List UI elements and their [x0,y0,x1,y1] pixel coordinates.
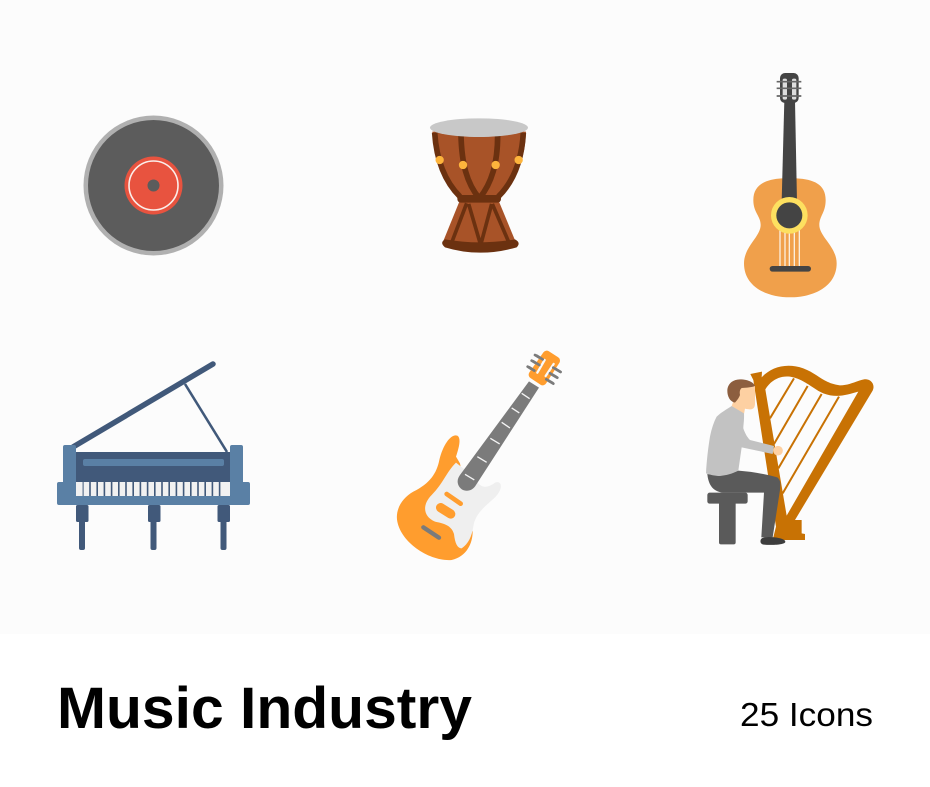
stool [707,493,748,544]
icon: djembe drum [430,118,528,253]
icon: acoustic guitar [744,73,837,297]
icon: grand piano [57,364,250,550]
icon: harpist playing a harp [706,366,874,545]
icon count label: 25 Icons [740,696,873,733]
person [706,379,785,545]
icon: vinyl record [84,116,224,256]
harp [750,366,874,540]
title: Music Industry [57,676,472,741]
icon: electric guitar [397,355,561,560]
